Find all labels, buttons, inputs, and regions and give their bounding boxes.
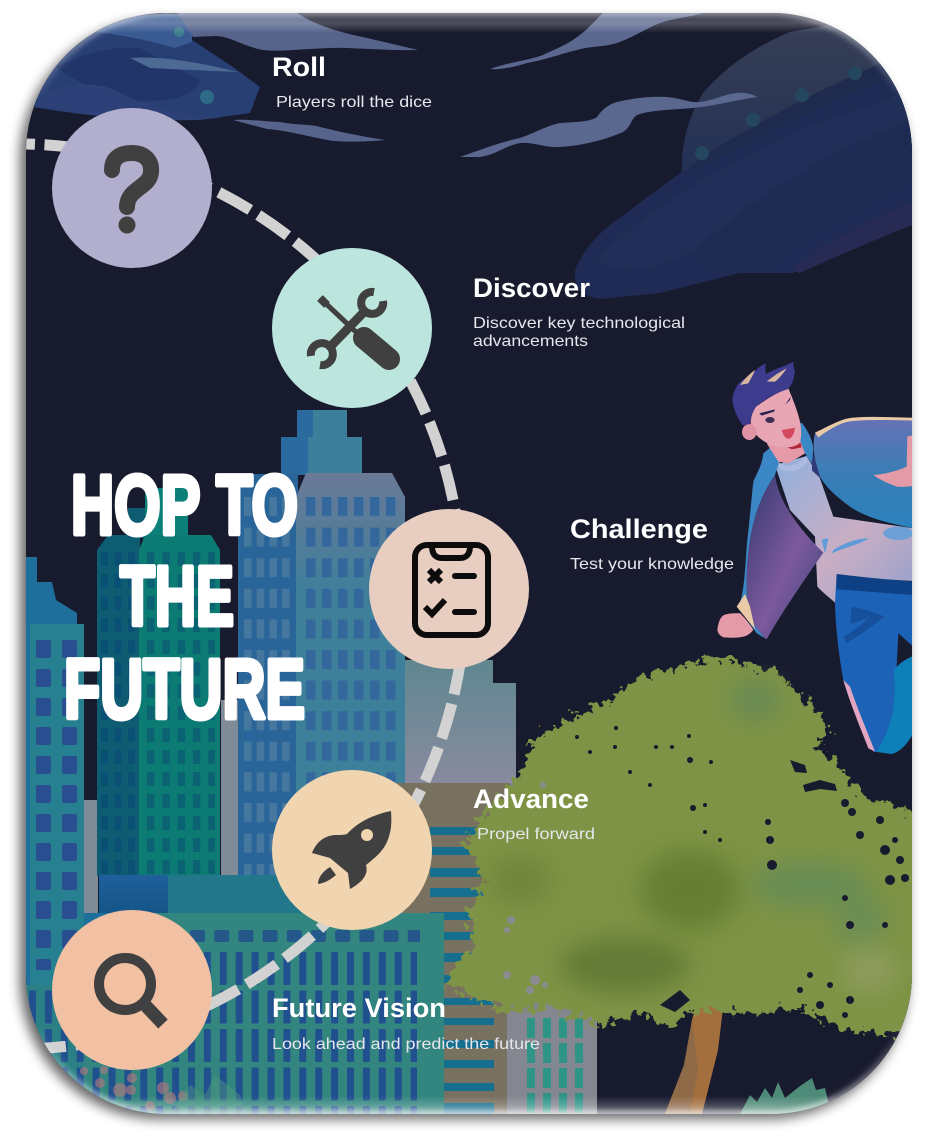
step: roll node (52, 108, 212, 268)
jacket collar (738, 423, 813, 639)
text: challenge: Test your knowledge (570, 556, 734, 573)
illustration: jumping boy (717, 362, 913, 754)
text: future vision: Look ahead and predict the future (272, 1036, 540, 1053)
illustration: city skyline (26, 410, 597, 1115)
text: roll (272, 52, 432, 111)
building: grey right low (507, 1000, 597, 1114)
text: discover: advancements (473, 333, 588, 350)
building: teal tower (128, 508, 146, 538)
building: grey strip (84, 800, 98, 914)
building: grey back right (405, 660, 516, 790)
text: future vision: Future Vision (272, 993, 446, 1023)
text: challenge: Challenge (570, 514, 708, 544)
bush right (740, 1078, 838, 1114)
right hand (873, 435, 913, 487)
hair (732, 362, 795, 425)
illustration: right flying saucer (575, 20, 912, 299)
text: discover: Discover (473, 273, 590, 303)
title: THE (120, 549, 234, 643)
icon: wrench and screwdriver (311, 292, 389, 365)
step: challenge node (369, 509, 529, 669)
text: roll: Roll (272, 52, 326, 82)
text: roll: Players roll the dice (276, 94, 432, 111)
icon: question mark (112, 153, 151, 234)
illustration: left flying saucer (33, 13, 260, 120)
building: tall blue tower (297, 410, 313, 438)
text: future vision (272, 993, 540, 1053)
title: FUTURE (64, 642, 305, 736)
building: big teal block (26, 985, 86, 1089)
jacket sleeve (814, 418, 913, 528)
icon: rocket (312, 811, 391, 889)
text: advance: Advance (473, 784, 589, 814)
step: discover node (272, 248, 432, 408)
text: discover: Discover key technological (473, 315, 685, 332)
building: left tower (26, 557, 77, 1009)
text: advance: Propel forward (477, 826, 595, 843)
building: tan striped (396, 783, 516, 1114)
canopy shading (490, 678, 898, 994)
building: grey back (221, 700, 239, 876)
face (751, 388, 801, 447)
icon: checklist clipboard (415, 545, 488, 635)
canopy holes (575, 726, 909, 1018)
title (64, 458, 305, 736)
dashed path (26, 144, 466, 1049)
text: advance (473, 784, 595, 843)
building: low blocks (99, 875, 168, 915)
illustration: flowers and plants (80, 1066, 838, 1114)
title: HOP TO (71, 458, 298, 552)
tree canopy (445, 657, 925, 1036)
neck and shirt collar (767, 440, 805, 463)
tree trunk (665, 1006, 722, 1114)
shirt (775, 456, 913, 603)
illustration: left clouds (177, 13, 418, 142)
text: discover (473, 273, 685, 350)
icon: magnifying glass (99, 958, 163, 1024)
canopy grey gaps (503, 782, 548, 994)
text: challenge (570, 514, 734, 573)
left hand (717, 613, 753, 638)
pants (835, 580, 913, 754)
illustration: tree (445, 657, 925, 1114)
jacket lining (747, 475, 823, 639)
step: advance node (272, 770, 432, 930)
step: future vision node (52, 910, 212, 1070)
illustration: right clouds (460, 13, 757, 157)
